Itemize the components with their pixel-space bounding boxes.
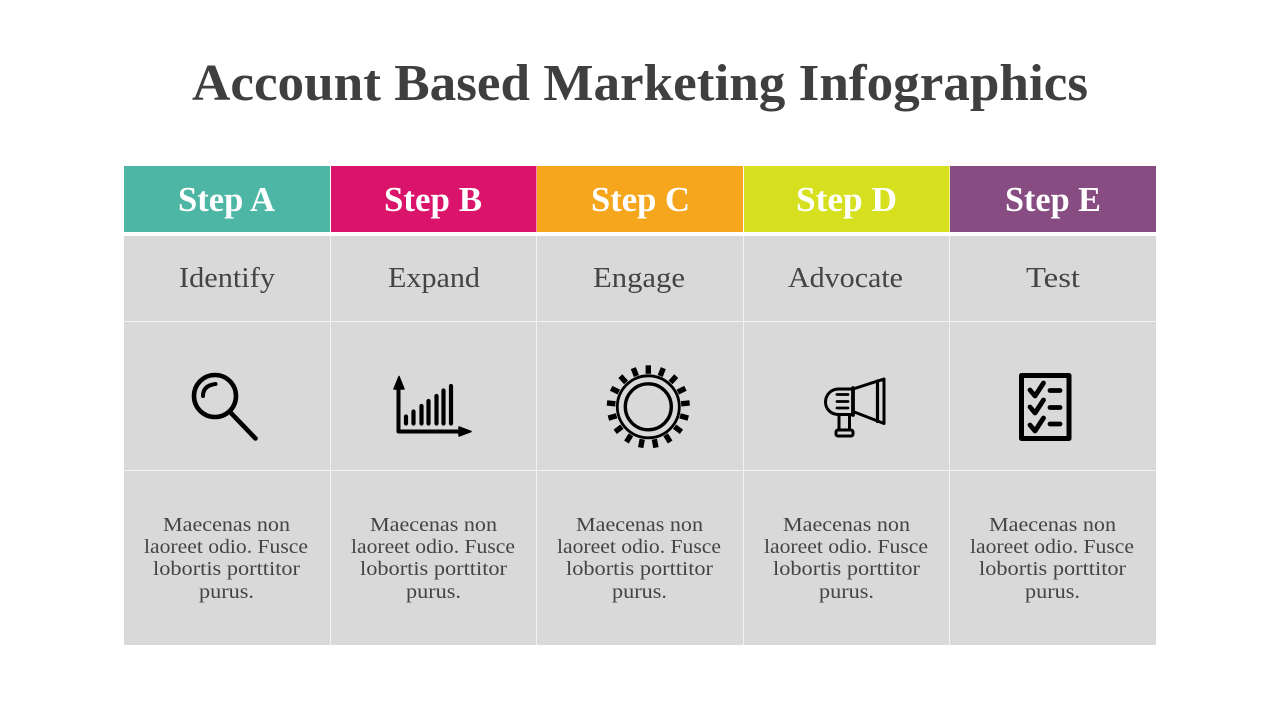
title: Account Based Marketing Infographics — [192, 55, 1088, 112]
text block: Step C description — [557, 514, 721, 603]
text block: Step A description: Maecenas non — [163, 514, 290, 536]
icon: bar chart with arrows — [394, 376, 471, 436]
text block: Step C description: laoreet odio. Fusce — [557, 536, 721, 558]
header: Step A — [124, 166, 330, 232]
text block: Step E description — [970, 514, 1134, 603]
header: Step A: Step A — [178, 180, 276, 219]
header: Step D: Step D — [796, 180, 897, 219]
text block: Step D description: Maecenas non — [783, 514, 910, 536]
text block: Step B description: laoreet odio. Fusce — [351, 536, 515, 558]
icon: megaphone — [826, 379, 884, 436]
header: Step C — [537, 166, 743, 232]
text block: Step D description: purus. — [819, 581, 874, 603]
text block: Step B description: lobortis porttitor — [360, 558, 507, 580]
label: Expand: Expand — [388, 262, 481, 294]
text block: Step B description: Maecenas non — [370, 514, 497, 536]
text block: Step A description: lobortis porttitor — [153, 558, 300, 580]
text block: Step A description — [144, 514, 308, 603]
text block: Step E description: Maecenas non — [989, 514, 1116, 536]
text block: Step C description: lobortis porttitor — [566, 558, 713, 580]
text block: Step B description: purus. — [406, 581, 461, 603]
icon: checklist — [1022, 376, 1069, 438]
text block: Step C description: Maecenas non — [576, 514, 703, 536]
text block: Step A description: purus. — [199, 581, 254, 603]
header: Step B: Step B — [384, 180, 482, 219]
text block: Step A description: laoreet odio. Fusce — [144, 536, 308, 558]
panel: grey table background — [124, 236, 1156, 645]
header: Step E: Step E — [1005, 180, 1101, 219]
table — [124, 166, 1156, 645]
label: Engage: Engage — [593, 262, 685, 294]
text block: Step E description: laoreet odio. Fusce — [970, 536, 1134, 558]
text block: Step D description: laoreet odio. Fusce — [764, 536, 928, 558]
icon: magnifying glass — [194, 375, 256, 438]
label: Test: Test — [1026, 262, 1080, 294]
header: Step C: Step C — [591, 180, 690, 219]
header: Step D — [744, 166, 950, 232]
label: Identify: Identify — [179, 262, 276, 294]
text block: Step D description — [764, 514, 928, 603]
header: Step E — [950, 166, 1156, 232]
text block: Step E description: purus. — [1025, 581, 1080, 603]
text block: Step C description: purus. — [612, 581, 667, 603]
icon: sun gear — [607, 365, 690, 448]
label: Advocate: Advocate — [788, 262, 903, 294]
text block: Step D description: lobortis porttitor — [773, 558, 920, 580]
text block: Step E description: lobortis porttitor — [979, 558, 1126, 580]
header: Step B — [331, 166, 536, 232]
text block: Step B description — [351, 514, 515, 603]
